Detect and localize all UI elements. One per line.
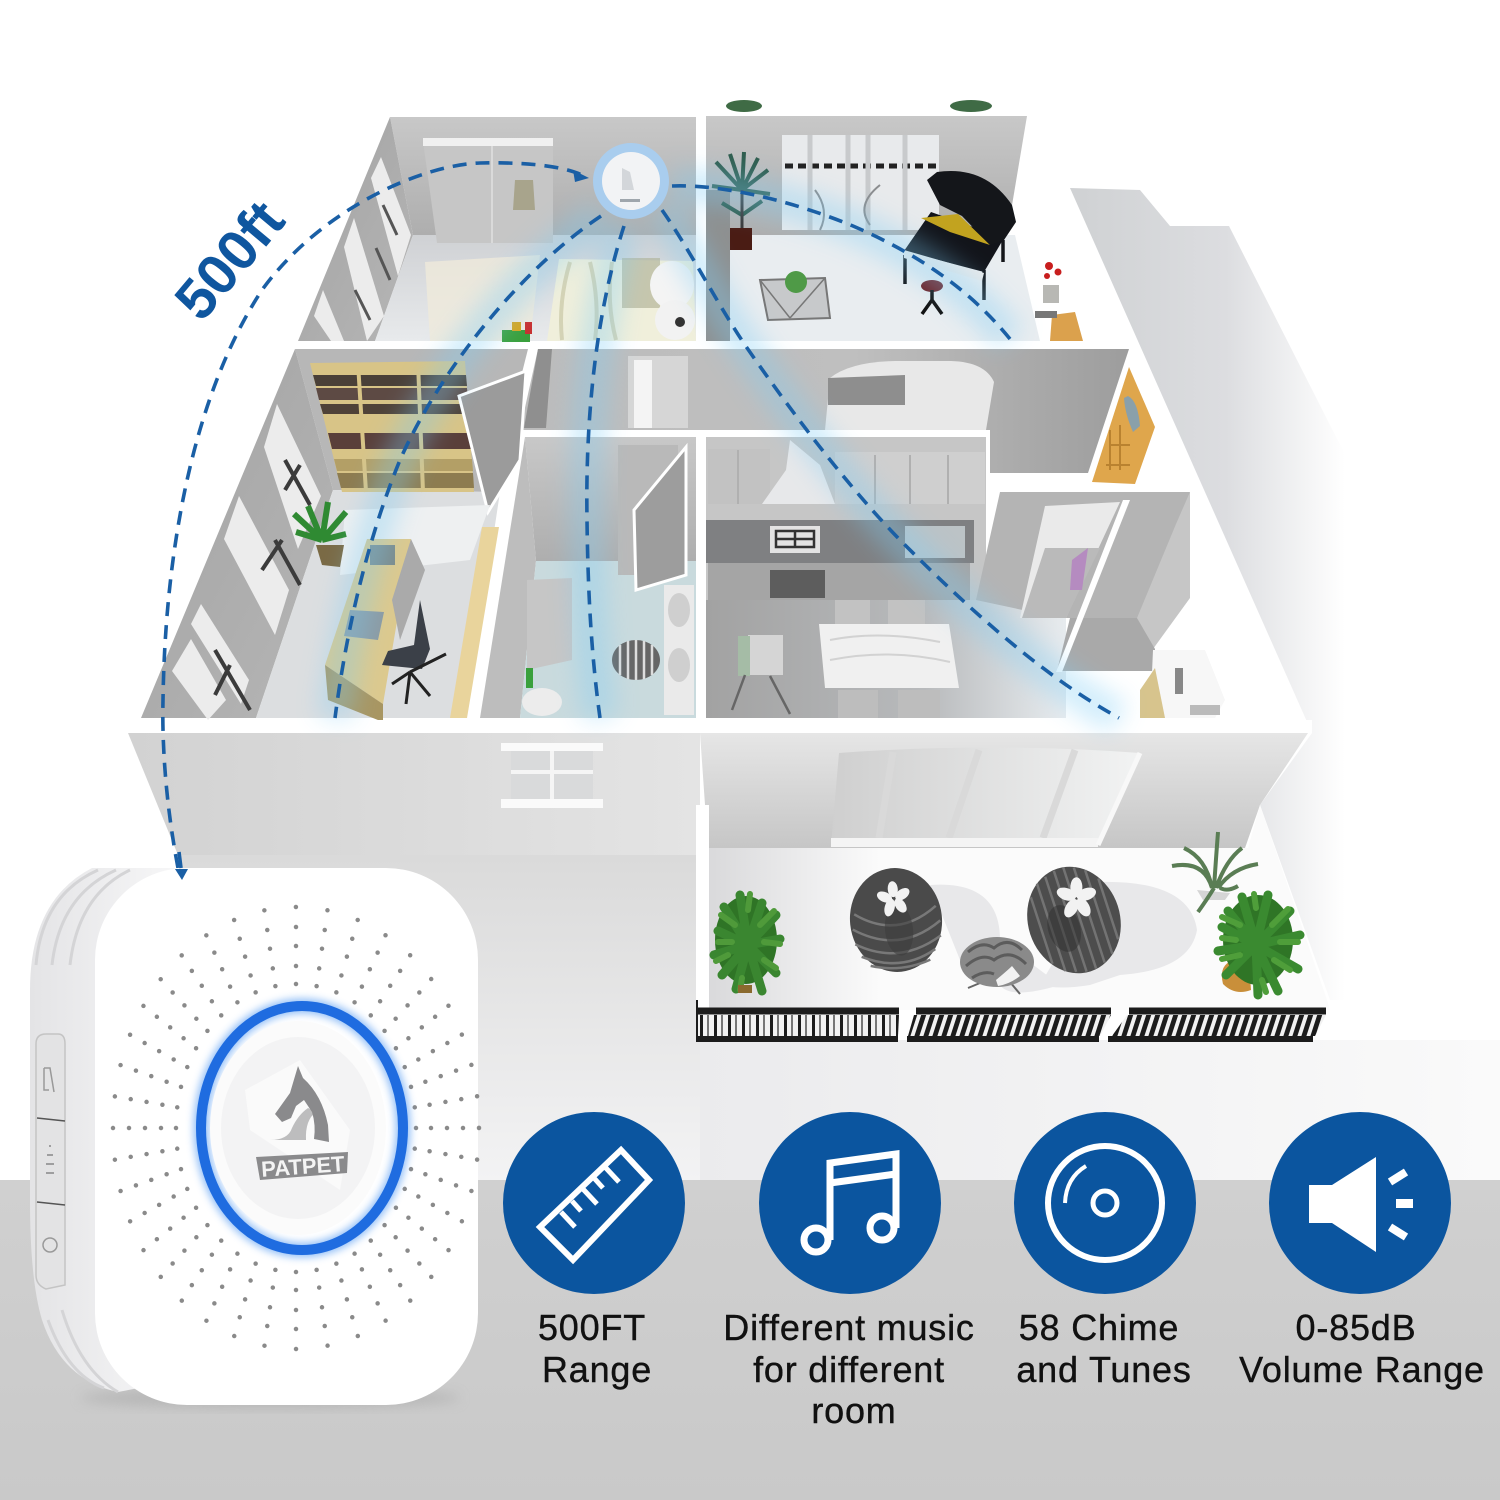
text: 0-85dB Volume Range — [1239, 1307, 1485, 1390]
feature: chimes — [1014, 1112, 1196, 1390]
front door — [1092, 367, 1155, 484]
small window — [501, 743, 603, 808]
arc: signal to study — [335, 216, 601, 718]
cushion left — [845, 863, 947, 977]
bed — [547, 258, 696, 341]
balcony window — [831, 748, 1140, 847]
small round table — [960, 937, 1034, 994]
feature: different music — [723, 1112, 975, 1431]
open door — [459, 371, 526, 512]
text: 0-85dB Volume Range: Volume Range — [1239, 1349, 1485, 1390]
toy blocks — [502, 322, 532, 342]
house front wall — [126, 720, 1312, 855]
text: different music — [723, 1307, 975, 1431]
white structure — [126, 115, 1312, 733]
glass table and plant — [760, 271, 830, 320]
text: 58 Chime and Tunes: 58 Chime — [1019, 1307, 1179, 1348]
dining table — [819, 600, 959, 718]
shelving unit — [1140, 650, 1225, 718]
room: piano lounge — [706, 116, 1083, 341]
house floor plan — [126, 100, 1312, 733]
window panes — [172, 404, 321, 720]
plant back — [1172, 832, 1258, 912]
plant right — [1218, 894, 1300, 995]
logo: dog and cat — [270, 1066, 329, 1142]
basins — [664, 585, 694, 715]
label: 500ft: 500ft — [163, 189, 297, 332]
logo banner: PATPET — [260, 1151, 346, 1182]
room: bedroom — [298, 117, 696, 342]
text: 58 Chime and Tunes — [1016, 1307, 1192, 1390]
text: 500FT Range: Range — [542, 1349, 652, 1390]
arc: signal to lounge — [672, 186, 1010, 339]
side chair — [732, 635, 790, 714]
small chime in bedroom — [593, 143, 669, 219]
railing — [696, 1000, 1326, 1040]
glowing ring — [192, 997, 412, 1259]
flowers and ornaments — [1035, 262, 1083, 341]
arrow onto device — [175, 852, 188, 880]
arc: signal to bathroom — [587, 226, 624, 718]
room: bathroom — [480, 437, 696, 718]
wardrobe — [423, 138, 553, 243]
right wall shadow — [1070, 188, 1500, 1000]
text: different music: Different music — [723, 1307, 975, 1348]
text: 500FT Range — [538, 1307, 652, 1390]
office chair — [382, 600, 446, 704]
text: 58 Chime and Tunes: and Tunes — [1016, 1349, 1192, 1390]
tall cabinet — [450, 527, 499, 718]
bathroom door — [618, 445, 686, 590]
study plant — [294, 502, 346, 567]
rooftop plants — [726, 100, 992, 112]
arc: range arc to receiver — [163, 163, 582, 868]
signal paths — [163, 163, 1119, 868]
room: study — [141, 349, 528, 722]
room: kitchen — [706, 437, 1066, 718]
icon: music notes — [759, 1112, 941, 1294]
device: PATPET receiver — [30, 868, 479, 1408]
text: 0-85dB Volume Range: 0-85dB — [1296, 1307, 1416, 1348]
signal glow — [335, 186, 1119, 718]
device face — [95, 868, 478, 1405]
desk — [325, 539, 425, 722]
icon: ruler — [503, 1112, 685, 1294]
balcony — [696, 748, 1330, 1040]
room: closet and laundry — [976, 492, 1225, 718]
arc: signal to kitchen — [662, 210, 1119, 718]
french windows — [782, 135, 940, 230]
piano stool — [921, 280, 943, 314]
bookshelf — [310, 361, 474, 492]
plant left — [714, 894, 780, 993]
text: 500FT Range: 500FT — [538, 1307, 646, 1348]
arrowhead to receiver — [573, 170, 589, 182]
text: different music: for different — [753, 1349, 945, 1390]
device shadow — [80, 1388, 460, 1408]
cushion right — [1014, 854, 1134, 986]
washing machine — [527, 578, 572, 670]
device buttons — [36, 1034, 65, 1289]
text: different music: room — [811, 1390, 897, 1431]
icon: speaker — [1269, 1112, 1451, 1294]
toilet — [522, 688, 562, 716]
room: hallway — [520, 349, 1155, 484]
speaker holes — [113, 907, 479, 1349]
icon: disc — [1014, 1112, 1196, 1294]
grand piano — [904, 171, 1016, 300]
feature: 500FT range — [503, 1112, 685, 1390]
furniture shadow — [930, 882, 1197, 992]
center button — [210, 1021, 386, 1235]
feature: volume — [1239, 1112, 1485, 1390]
potted palm — [712, 152, 770, 250]
striped mat — [612, 640, 660, 680]
device body side — [30, 868, 180, 1392]
sun patch — [340, 505, 490, 575]
